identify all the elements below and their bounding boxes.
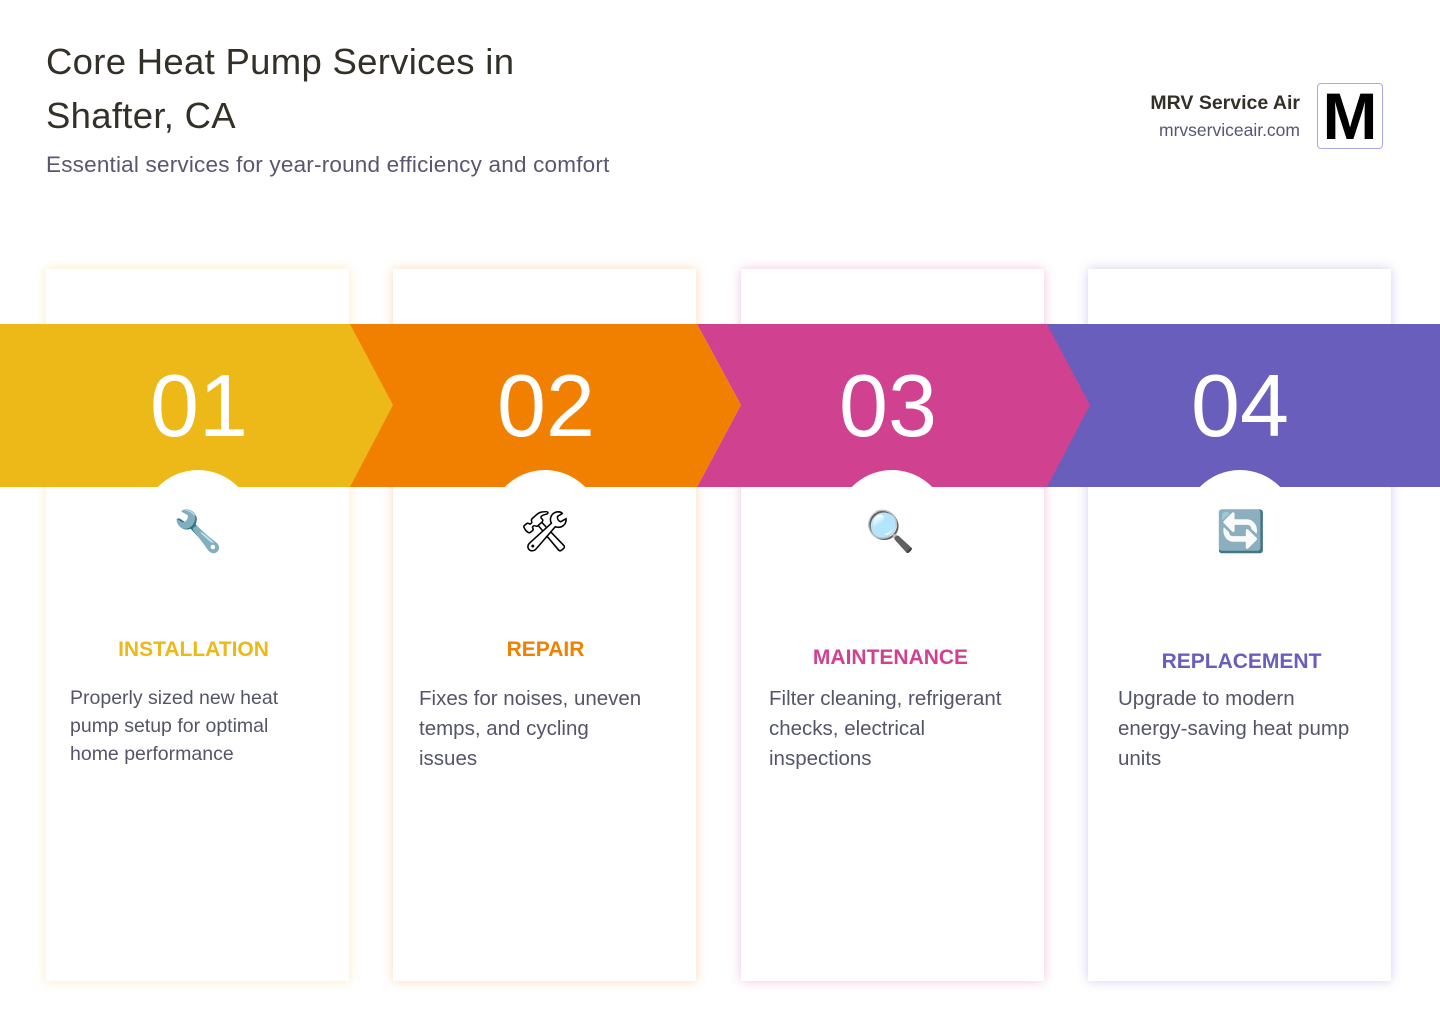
text 3: Filter cleaning, refrigerant checks, electrical inspections: [769, 687, 1001, 770]
text 4: Upgrade to modern energy‑saving heat pump units: [1118, 687, 1349, 770]
banner arrows: 01: [150, 356, 248, 455]
card 2: [393, 269, 696, 981]
title: Shafter, CA: [46, 95, 236, 136]
text 2: Fixes for noises, uneven temps, and cycling issues: [419, 687, 641, 770]
brand url: mrvserviceair.com: [1159, 120, 1300, 140]
subtitle: Essential services for year-round efficiency and comfort: [46, 152, 610, 177]
title: [46, 41, 514, 136]
heading 1: INSTALLATION: [118, 638, 269, 661]
card 1: [46, 269, 349, 981]
logo: M: [1322, 79, 1377, 153]
banner arrows: 04: [1191, 356, 1289, 455]
icon: magnifier: 🔍: [865, 509, 915, 555]
heading 2: REPAIR: [507, 638, 584, 661]
icon: wrench: 🔧: [173, 509, 223, 555]
brand name: MRV Service Air: [1150, 92, 1300, 114]
text 1: Properly sized new heat pump setup for optimal home performance: [70, 687, 278, 765]
title: Core Heat Pump Services in: [46, 41, 514, 82]
brand block: [1150, 79, 1383, 153]
icon: refresh: 🔄: [1216, 509, 1266, 555]
banner arrows: 02: [497, 356, 595, 455]
banner arrows: [0, 324, 1440, 487]
banner arrows: 03: [839, 356, 937, 455]
card 3: [741, 269, 1044, 981]
card 4: [1088, 269, 1391, 981]
heading 4: REPLACEMENT: [1162, 650, 1321, 673]
heading 3: MAINTENANCE: [813, 646, 968, 669]
icon: hammer and wrench: 🛠: [520, 509, 570, 555]
